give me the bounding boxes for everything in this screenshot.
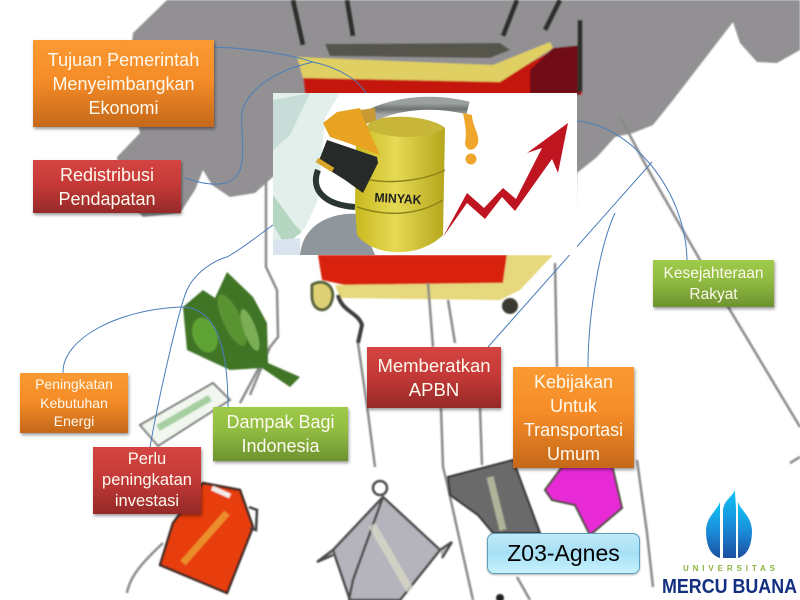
barrel label: MINYAK [374,190,422,207]
box: Kesejahteraan Rakyat [653,260,774,307]
magenta shirt [545,465,622,535]
grey sack beras [317,481,452,600]
leaf bundle [183,272,300,387]
box: Redistribusi Pendapatan: Redistribusi [60,164,154,184]
box: Peningkatan Kebutuhan Energi [20,373,128,433]
box: Kesejahteraan Rakyat: Kesejahteraan [664,264,763,282]
hanging cords [127,117,800,600]
red jerry can [160,483,257,593]
grey cloud [117,0,800,250]
grey sack gula [448,460,540,533]
box: Dampak Bagi Indonesia [213,407,348,461]
box: Kebijakan Untuk Transportasi Umum: Umum [547,444,600,464]
box: Kebijakan Untuk Transportasi Umum: Untuk [550,396,597,416]
balloon basket [293,0,582,343]
nozzle [372,103,468,115]
box: Memberatkan APBN: Memberatkan [377,354,491,376]
box: Perlu peningkatan investasi: investasi [115,492,179,510]
logo emblem and wordmark: UNIVERSITAS [683,564,776,573]
box: Tujuan Pemerintah: Menyeimbangkan [52,74,195,94]
box: Memberatkan APBN [367,347,501,408]
banknotes [273,93,340,250]
box: Peningkatan Kebutuhan Energi: Energi [54,413,94,429]
box: Dampak Bagi Indonesia: Indonesia [241,436,320,456]
box: Kebijakan Untuk Transportasi Umum [513,367,634,468]
oil drops [463,113,478,150]
box: Dampak Bagi Indonesia: Dampak Bagi [226,412,335,432]
box: Peningkatan Kebutuhan Energi: Kebutuhan [40,395,108,411]
hose loop [316,170,355,207]
box: Perlu peningkatan investasi: peningkatan [102,471,192,489]
box: Memberatkan APBN: APBN [409,378,459,400]
box: Tujuan Pemerintah [33,40,214,127]
label: Z03-Agnes: Z03-Agnes [507,540,620,566]
box: Redistribusi Pendapatan: Pendapatan [58,188,156,208]
small label tag [140,383,230,446]
box: Kebijakan Untuk Transportasi Umum: Transportasi [524,420,623,440]
logo emblem and wordmark [662,490,797,598]
box: Peningkatan Kebutuhan Energi: Peningkatan [35,376,113,392]
box: Perlu peningkatan investasi: Perlu [128,450,166,468]
red rising arrow [443,123,568,237]
label: Z03-Agnes [487,533,640,574]
box: Perlu peningkatan investasi [93,447,201,514]
box: Kesejahteraan Rakyat: Rakyat [689,286,738,302]
box: Redistribusi Pendapatan [33,160,181,213]
barrel [355,119,445,252]
box: Tujuan Pemerintah: Tujuan Pemerintah [48,50,199,70]
logo: Universitas Mercu Buana [657,477,800,600]
box: Kebijakan Untuk Transportasi Umum: Kebijakan [534,372,613,392]
box: Tujuan Pemerintah: Ekonomi [88,98,158,118]
